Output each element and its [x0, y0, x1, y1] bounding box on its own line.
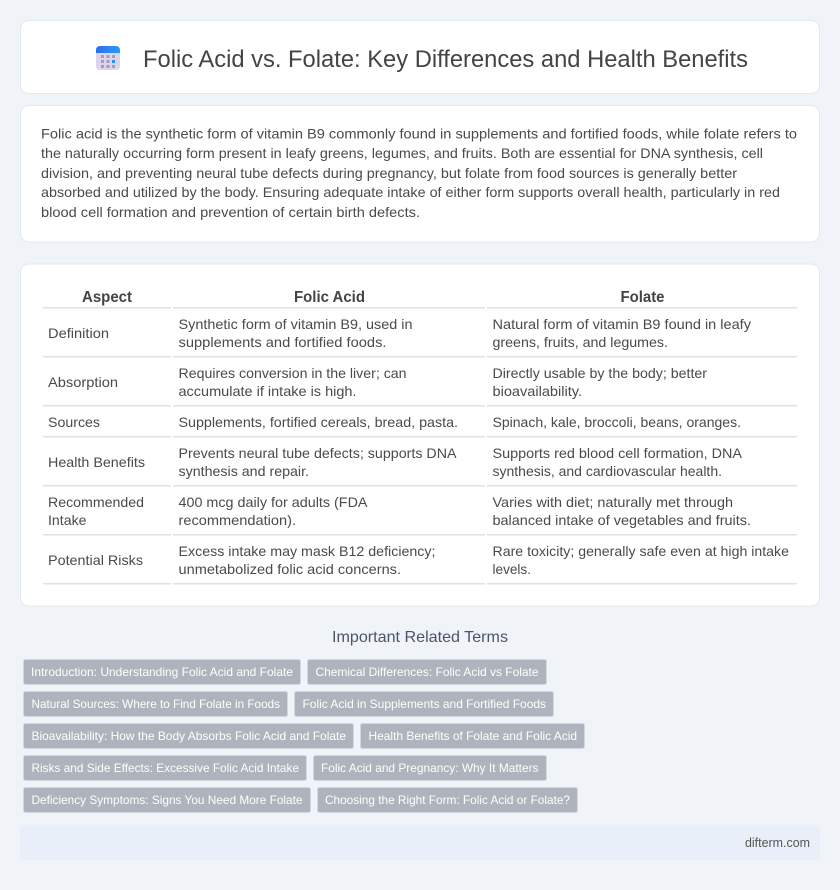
row: absorption — [48, 365, 707, 399]
tag: Folic Acid and Pregnancy: Why It Matters — [321, 761, 538, 775]
row: recommended intake: Varies with diet; naturally met through — [492, 494, 733, 510]
row: sources: Supplements, fortified cereals, bread, pasta. — [178, 414, 458, 430]
text block: introduction paragraph: Folic acid is the synthetic form of vitamin B9 commonly found in supplements and fortified foods, while folate refers to — [41, 126, 797, 142]
tag: Choosing the Right Form: Folic Acid or Folate? — [325, 793, 570, 807]
row: potential risks — [48, 543, 789, 577]
row: recommended intake: recommendation). — [178, 512, 296, 528]
row: absorption: accumulate if intake is high. — [178, 383, 356, 399]
tag — [24, 692, 288, 716]
tag: Introduction: Understanding Folic Acid and Folate — [31, 665, 293, 679]
table header: Aspect — [82, 289, 132, 306]
tag: Folic Acid in Supplements and Fortified Foods — [302, 697, 546, 711]
footer brand text: difterm.com — [745, 836, 810, 850]
row: absorption: Directly usable by the body; better — [492, 365, 707, 381]
related terms tags — [24, 660, 584, 812]
tag — [318, 788, 578, 812]
text block: introduction paragraph: the naturally occurring form present in leafy greens, legumes, and fruits. Both are essential for DNA synthesis, cell — [41, 145, 763, 161]
row: potential risks: unmetabolized folic acid concerns. — [178, 561, 401, 577]
row: definition — [48, 316, 751, 350]
panel: comparison table — [20, 264, 820, 606]
tag: Health Benefits of Folate and Folic Acid — [368, 729, 577, 743]
text block: introduction paragraph: absorbed and utilized by the body. Ensuring adequate intake of either form supports overall health, particularly in red — [41, 184, 780, 200]
row: health benefits — [48, 445, 743, 479]
table header: Folic Acid — [294, 289, 365, 306]
row: health benefits: synthesis, and cardiovascular health. — [492, 463, 722, 479]
panel: header — [20, 20, 820, 94]
row: potential risks: Potential Risks — [48, 552, 143, 568]
row: recommended intake: balanced intake of vegetables and fruits. — [492, 512, 751, 528]
panel: introduction — [20, 106, 820, 242]
title: Folic Acid vs. Folate: Key Differences and Health Benefits — [143, 46, 748, 73]
icon: calendar — [96, 46, 120, 70]
heading: important related terms: Important Related Terms — [332, 629, 508, 646]
row: absorption: Requires conversion in the liver; can — [178, 365, 406, 381]
row: definition: Natural form of vitamin B9 found in leafy — [492, 316, 751, 332]
row: health benefits: Prevents neural tube defects; supports DNA — [178, 445, 457, 461]
row: potential risks: Excess intake may mask B12 deficiency; — [178, 543, 436, 559]
row: recommended intake: Intake — [48, 512, 87, 528]
tag: Bioavailability: How the Body Absorbs Folic Acid and Folate — [32, 729, 346, 743]
text block: introduction paragraph: division, and preventing neural tube defects during pregnancy, but folate from food sources is generally better — [41, 165, 737, 181]
table header — [82, 289, 665, 306]
tag: Risks and Side Effects: Excessive Folic Acid Intake — [32, 761, 299, 775]
row: recommended intake — [48, 494, 751, 528]
row: recommended intake: Recommended — [48, 494, 144, 510]
row: absorption: bioavailability. — [492, 383, 582, 399]
row: potential risks: Rare toxicity; generally safe even at high intake — [492, 543, 789, 559]
tag — [24, 660, 300, 684]
text block: introduction paragraph: blood cell formation and prevention of certain birth defects. — [41, 204, 420, 220]
footer — [20, 826, 820, 860]
row: sources: Sources — [48, 414, 100, 430]
table header: Folate — [620, 289, 665, 306]
row: definition: supplements and fortified foods. — [178, 334, 386, 350]
text block: introduction paragraph — [41, 126, 797, 220]
row: sources — [48, 414, 741, 430]
tag — [24, 788, 310, 812]
tag: Natural Sources: Where to Find Folate in Foods — [32, 697, 280, 711]
row: health benefits: Supports red blood cell formation, DNA — [492, 445, 743, 461]
tag — [294, 692, 554, 716]
tag — [24, 724, 354, 748]
row: potential risks: levels. — [492, 561, 531, 577]
row: definition: greens, fruits, and legumes. — [492, 334, 668, 350]
row: recommended intake: 400 mcg daily for adults (FDA — [178, 494, 368, 510]
row: definition: Synthetic form of vitamin B9, used in — [178, 316, 412, 332]
tag — [24, 756, 306, 780]
tag — [314, 756, 546, 780]
tag — [308, 660, 546, 684]
row: sources: Spinach, kale, broccoli, beans, oranges. — [492, 414, 741, 430]
tag: Chemical Differences: Folic Acid vs Folate — [316, 665, 539, 679]
tag — [360, 724, 584, 748]
tag: Deficiency Symptoms: Signs You Need More Folate — [32, 793, 303, 807]
row: health benefits: Health Benefits — [48, 454, 145, 470]
row: definition: Definition — [48, 325, 109, 341]
row: health benefits: synthesis and repair. — [178, 463, 309, 479]
row: absorption: Absorption — [48, 374, 118, 390]
